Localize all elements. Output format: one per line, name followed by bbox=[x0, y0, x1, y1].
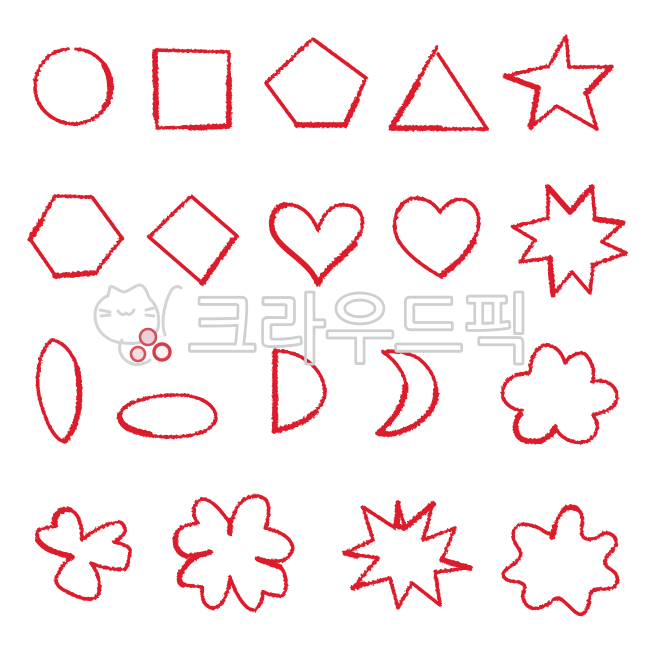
icon: four-petal flower bbox=[37, 510, 130, 599]
icon: circle bbox=[35, 49, 112, 124]
icon: wavy blob flower bbox=[503, 507, 618, 614]
icon: seven-petal flower bbox=[175, 496, 293, 610]
icon: pointed heart bbox=[272, 205, 363, 284]
icon: eight-point star bbox=[513, 187, 626, 295]
icon: half circle bbox=[274, 351, 325, 431]
icon: pentagon bbox=[266, 39, 366, 125]
icon: vertical oval bbox=[38, 340, 81, 441]
icon: horizontal oval bbox=[120, 395, 216, 437]
watermark: brand text: 크라우드픽 bbox=[188, 288, 532, 373]
icon: triangle bbox=[390, 47, 487, 129]
icon: diamond bbox=[149, 196, 237, 283]
icon: five-point star bbox=[505, 36, 611, 129]
icon: hexagon bbox=[30, 196, 122, 276]
icon: burst star bbox=[345, 503, 470, 608]
icon: round heart bbox=[395, 198, 479, 277]
watermark: cat logo bbox=[95, 285, 181, 364]
icon: six-petal cloud flower bbox=[502, 345, 617, 442]
icon: red clover on cat bbox=[131, 329, 170, 361]
icon: square bbox=[155, 50, 229, 128]
icon: crescent moon bbox=[377, 351, 436, 434]
